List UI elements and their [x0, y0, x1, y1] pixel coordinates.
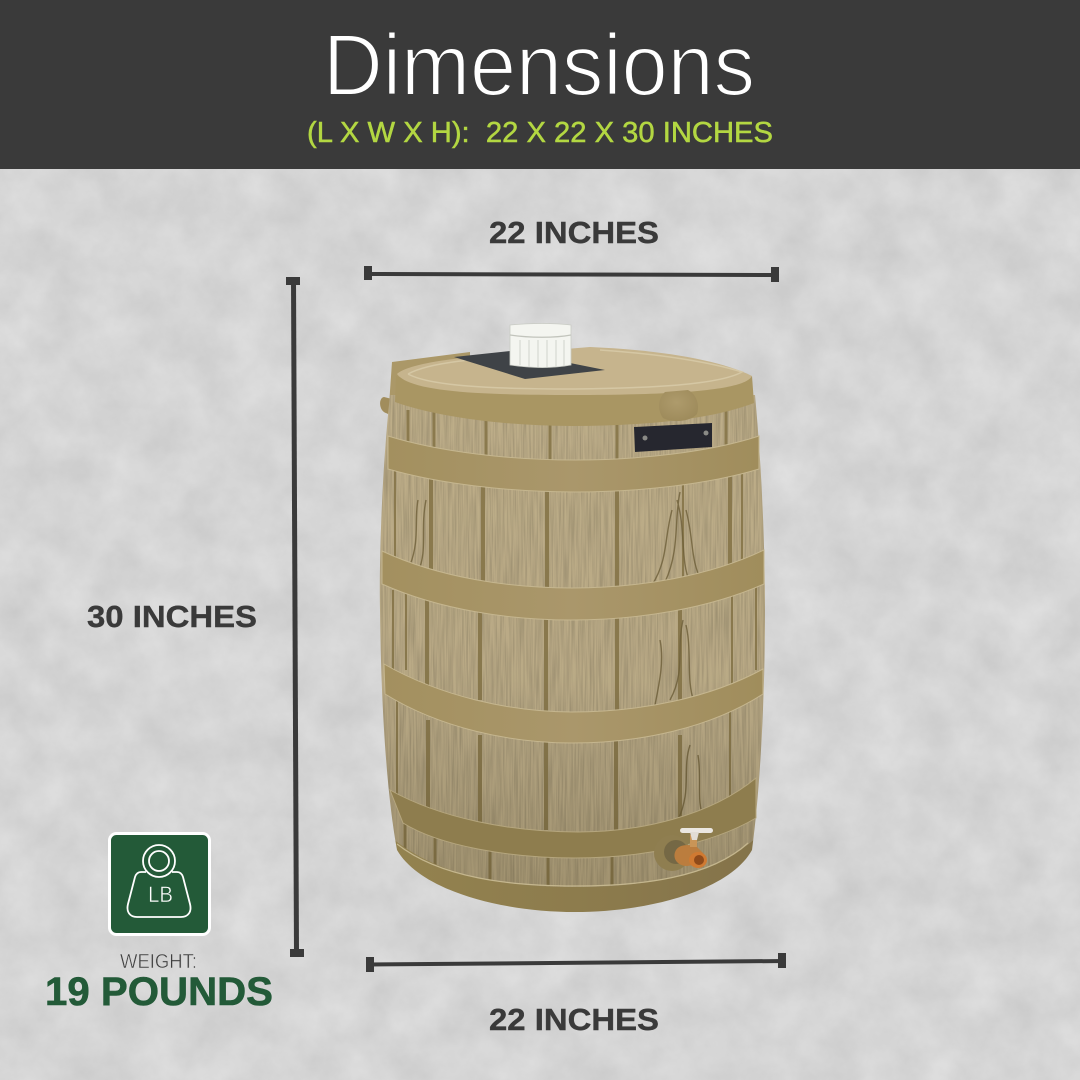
lid dark diverter plate [454, 351, 605, 379]
lower shading [384, 715, 762, 887]
weight icon badge [110, 834, 210, 934]
band 4 [390, 778, 756, 858]
band 2 [382, 550, 764, 620]
kettlebell icon [127, 845, 191, 917]
header band [0, 0, 1080, 169]
skirt highlight [397, 843, 748, 886]
lid inner ring [408, 350, 742, 389]
overflow spout [659, 390, 698, 421]
left handle [380, 397, 396, 418]
bottom width dimension bar [366, 953, 786, 972]
height dimension bar [286, 277, 304, 957]
spigot [654, 828, 713, 871]
barrel staves [376, 390, 770, 920]
top width dimension bar [364, 266, 779, 282]
height label: 30 INCHES [87, 599, 257, 634]
lid top [397, 347, 752, 395]
bottom skirt [396, 840, 754, 912]
band 1 [388, 436, 759, 492]
subtitle: (L X W X H): 22 X 22 X 30 INCHES [307, 117, 773, 149]
band 3 [384, 664, 763, 743]
stave seams [393, 410, 756, 885]
weight caption: WEIGHT: [120, 950, 197, 973]
top width label: 22 INCHES [489, 215, 659, 250]
bottom width label: 22 INCHES [489, 1002, 659, 1037]
lid back flange [388, 352, 470, 420]
title: Dimensions [323, 17, 755, 114]
white downspout adapter [510, 324, 571, 368]
mesh vent [634, 423, 712, 452]
LB text: LB [148, 882, 173, 907]
wood knots [410, 492, 704, 820]
weight value: 19 POUNDS [45, 970, 273, 1014]
lid side [395, 376, 754, 426]
rain barrel [376, 324, 770, 920]
